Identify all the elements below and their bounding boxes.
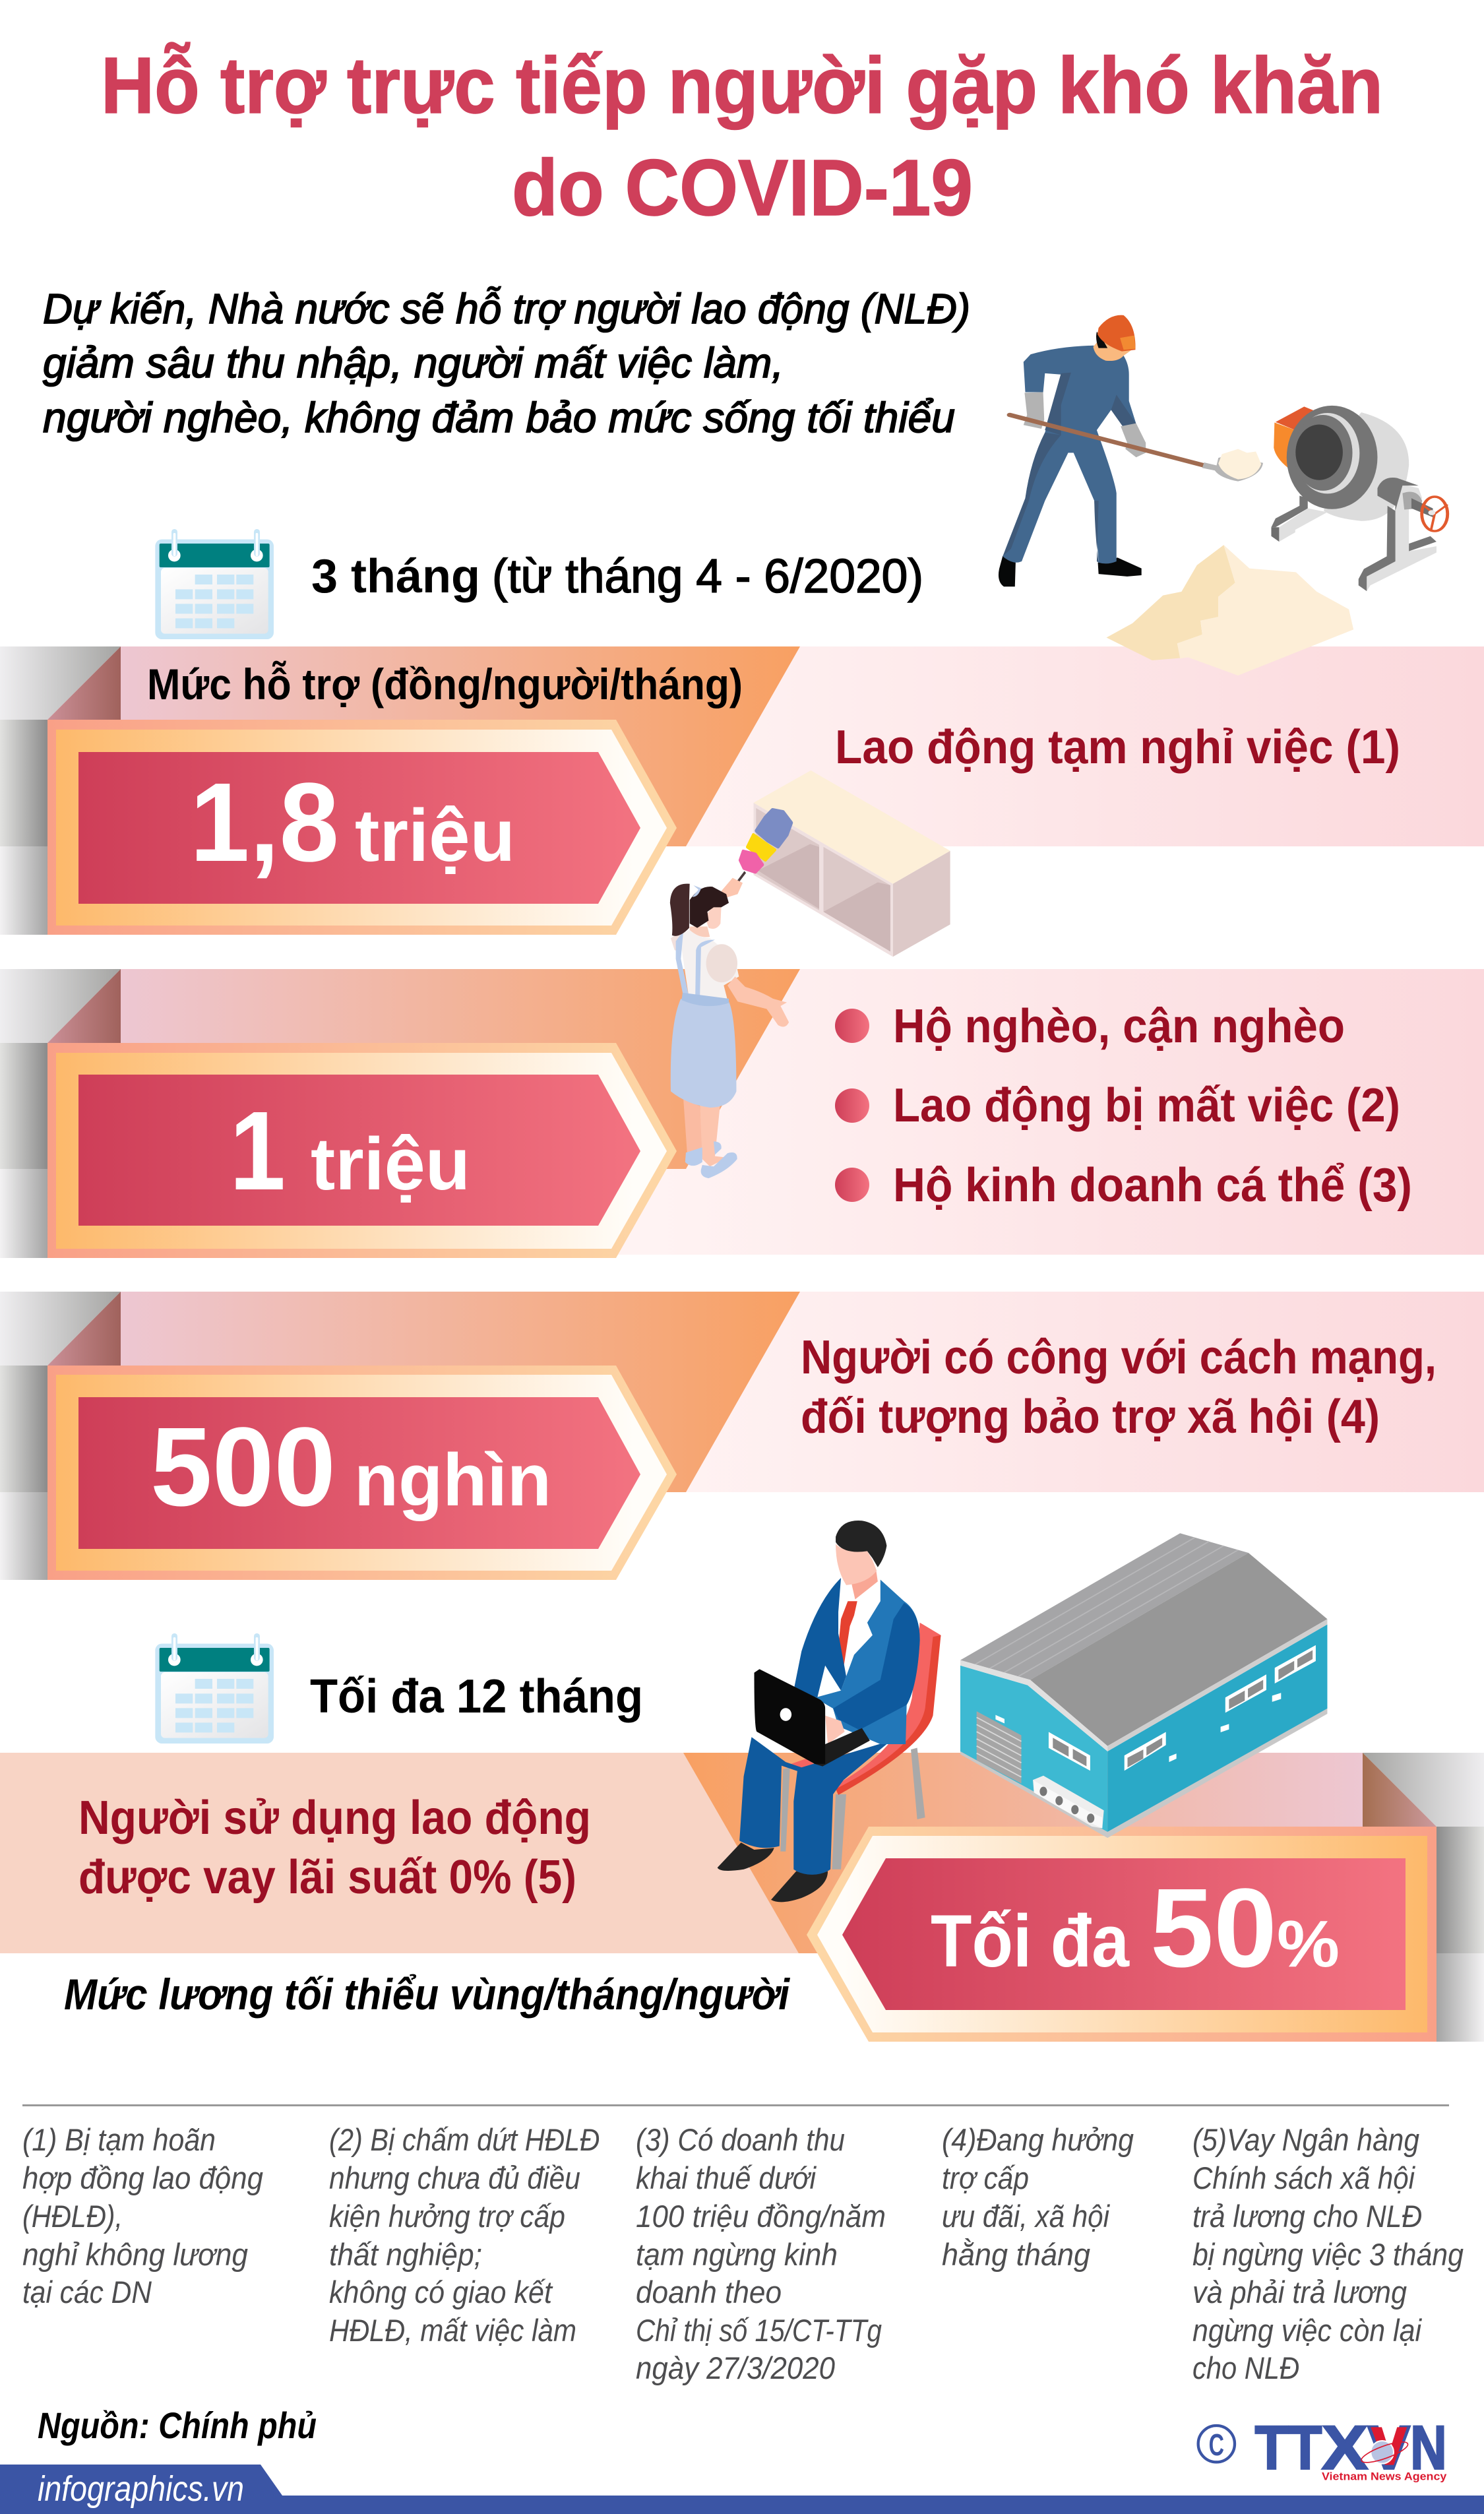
panel: 500 thousand: [0, 1292, 1484, 1580]
minimum wage caption: Mức lương tối thiểu vùng/tháng/người: [64, 1970, 791, 2019]
title: do COVID-19: [512, 142, 973, 232]
feather duster: [735, 810, 791, 885]
panel: up to 50 percent: %: [1277, 1907, 1340, 1981]
footnote 2: nhưng chưa đủ điều: [329, 2160, 580, 2195]
footnote 2: [329, 2122, 600, 2348]
footnote 4: ưu đãi, xã hội: [942, 2199, 1110, 2234]
panel: up to 50 percent: được vay lãi suất 0% (5): [78, 1851, 576, 1904]
footnote 3: khai thuế dưới: [636, 2160, 817, 2195]
panel: 500 thousand: đối tượng bảo trợ xã hội (4): [801, 1391, 1380, 1443]
calendar icon: 3 months: [155, 529, 274, 639]
woman: [670, 878, 789, 1178]
illustration: worker with shovel and cement mixer: [999, 315, 1448, 676]
duration heading: 3 months: [311, 550, 923, 603]
footnote 3: [636, 2122, 886, 2385]
panel: 1 million: Hộ kinh doanh cá thể (3): [893, 1159, 1412, 1212]
footnote 3: doanh theo: [636, 2275, 782, 2310]
shelf: [753, 770, 950, 957]
footnote 4: [942, 2122, 1134, 2272]
panel: 1.8 million: Mức hỗ trợ (đồng/người/tháng): [147, 660, 743, 708]
panel: 500 thousand: nghìn: [354, 1439, 551, 1521]
footnote 5: và phải trả lương: [1192, 2275, 1407, 2310]
intro text: người nghèo, không đảm bảo mức sống tối thiểu: [43, 394, 955, 441]
footnote 5: [1192, 2122, 1464, 2385]
footnote 1: (1) Bị tạm hoãn: [22, 2122, 216, 2157]
intro text: Dự kiến, Nhà nước sẽ hỗ trợ người lao động (NLĐ): [43, 285, 970, 332]
duration heading: 3 months: (từ tháng 4 - 6/2020): [492, 550, 923, 603]
title: Hỗ trợ trực tiếp người gặp khó khăn: [101, 40, 1383, 130]
logo: TTXVN: [1198, 2413, 1447, 2482]
footnote 5: trả lương cho NLĐ: [1192, 2199, 1422, 2234]
intro text: [43, 285, 970, 441]
sand pile: [1107, 545, 1353, 676]
footnote 4: hằng tháng: [942, 2237, 1090, 2272]
footnote 2: không có giao kết: [329, 2275, 553, 2310]
logo: TTXVN: TT: [1255, 2413, 1322, 2482]
footnote 1: (HĐLĐ),: [22, 2199, 123, 2234]
panel: 1.8 million: [0, 646, 1484, 935]
footnote 1: nghỉ không lương: [22, 2237, 248, 2272]
logo: TTXVN: C: [1209, 2428, 1224, 2462]
panel: 1.8 million: triệu: [355, 794, 515, 877]
logo: TTXVN: Vietnam News Agency: [1322, 2470, 1447, 2482]
panel: up to 50 percent: [0, 1753, 1484, 2042]
footer bar: [0, 2465, 1484, 2514]
footnotes: [22, 2104, 1464, 2385]
footnote 3: 100 triệu đồng/năm: [636, 2199, 886, 2234]
website: infographics.vn: [38, 2469, 244, 2509]
panel: 500 thousand: Người có công với cách mạng,: [801, 1331, 1437, 1384]
illustration: businessman on laptop: [718, 1521, 941, 1902]
footnote 3: (3) Có doanh thu: [636, 2122, 845, 2157]
duration heading: 12 months: Tối đa 12 tháng: [310, 1670, 643, 1723]
worker: [999, 315, 1263, 586]
footnote 2: (2) Bị chấm dứt HĐLĐ: [329, 2122, 600, 2157]
footnote 3: ngày 27/3/2020: [636, 2350, 835, 2385]
panel: up to 50 percent: Người sử dụng lao động: [78, 1792, 591, 1844]
footnote 5: bị ngừng việc 3 tháng: [1192, 2237, 1464, 2272]
panel: 1.8 million: 1,8: [190, 760, 339, 885]
source: Nguồn: Chính phủ: [38, 2404, 317, 2446]
panel: 500 thousand: 500: [150, 1404, 336, 1530]
title: [101, 40, 1383, 232]
footnote 4: trợ cấp: [942, 2160, 1029, 2195]
footnote 5: ngừng việc còn lại: [1192, 2313, 1422, 2348]
panel: 1 million: Hộ nghèo, cận nghèo: [893, 1000, 1345, 1053]
cement mixer: [1271, 406, 1448, 591]
logo: TTXVN: N: [1410, 2413, 1447, 2482]
footnote 1: tại các DN: [22, 2275, 152, 2310]
footnote 5: cho NLĐ: [1192, 2350, 1299, 2385]
panel: up to 50 percent: 50: [1150, 1866, 1277, 1991]
logo: TTXVN: V: [1367, 2413, 1410, 2482]
footnote 2: kiện hưởng trợ cấp: [329, 2199, 565, 2234]
footnote 2: thất nghiệp;: [329, 2237, 482, 2272]
panel: 1 million: triệu: [311, 1123, 470, 1205]
footnote 2: HĐLĐ, mất việc làm: [329, 2313, 576, 2348]
footnote 3: tạm ngừng kinh: [636, 2237, 838, 2272]
panel: 1 million: 1: [230, 1088, 286, 1214]
panel: up to 50 percent: Tối đa: [931, 1900, 1130, 1982]
footnote 1: [22, 2122, 263, 2310]
calendar icon: 12 months: [155, 1633, 274, 1744]
footnote 4: (4)Đang hưởng: [942, 2122, 1134, 2157]
footnote 1: hợp đồng lao động: [22, 2160, 263, 2195]
footnote 3: Chỉ thị số 15/CT-TTg: [636, 2313, 882, 2348]
panel: 1 million: [0, 969, 1484, 1258]
illustration: woman dusting a shelf: [670, 770, 950, 1178]
panel: 1 million: Lao động bị mất việc (2): [893, 1079, 1400, 1132]
duration heading: 3 months: 3 tháng: [311, 550, 480, 603]
footnote 5: (5)Vay Ngân hàng: [1192, 2122, 1419, 2157]
illustration: factory building: [960, 1533, 1327, 1838]
intro text: giảm sâu thu nhập, người mất việc làm,: [43, 339, 784, 387]
logo: TTXVN: X: [1322, 2413, 1368, 2482]
panel: 1.8 million: Lao động tạm nghỉ việc (1): [835, 721, 1400, 774]
outdoor AC units: [1033, 1776, 1104, 1828]
footnote 5: Chính sách xã hội: [1192, 2160, 1415, 2195]
